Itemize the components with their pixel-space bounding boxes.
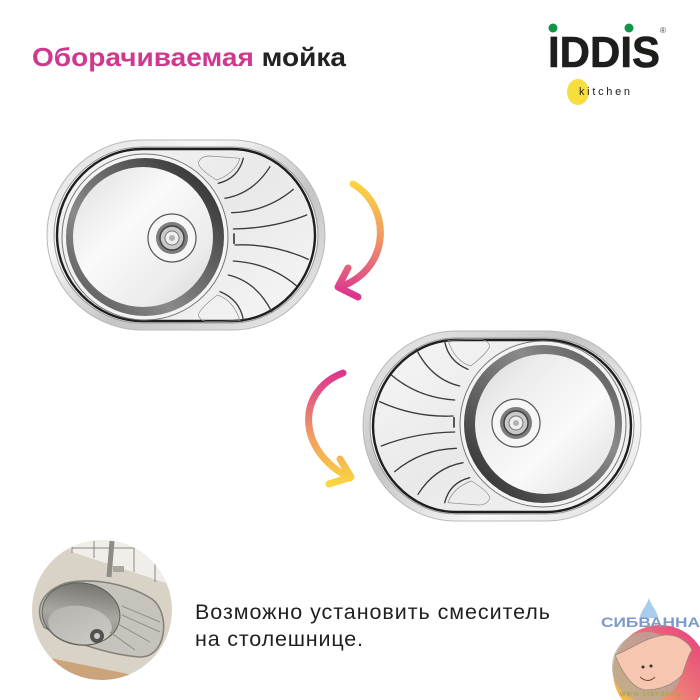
logo: IDDIS kitchen: ®: [660, 26, 666, 35]
arrow: clockwise down to the left: [338, 184, 380, 297]
watermark: СИБВАННА: СИБВАННА: [601, 614, 700, 630]
logo: IDDIS kitchen: [548, 24, 666, 105]
backsplash tiles: [70, 540, 166, 583]
watermark: СИБВАННА: [601, 598, 700, 700]
sink top, bowl on the left: [47, 140, 325, 330]
logo: IDDIS kitchen: kitchen: [579, 86, 630, 98]
photo: installed sink: [32, 540, 172, 680]
faucet: [109, 541, 112, 577]
arrow: counter-clockwise down to the right: [309, 373, 351, 484]
title: Оборачиваемая мойка: [32, 42, 347, 72]
sink body: [40, 581, 164, 657]
body text: Возможно установить смеситель: [195, 600, 550, 624]
body text: на столешнице.: [195, 627, 363, 651]
watermark: СИБВАННА: www.sibvanna: [619, 691, 680, 698]
cabinet: [51, 658, 130, 680]
logo: IDDIS kitchen: IDDIS: [548, 28, 660, 77]
sink rotated, bowl on the right: [363, 331, 641, 521]
